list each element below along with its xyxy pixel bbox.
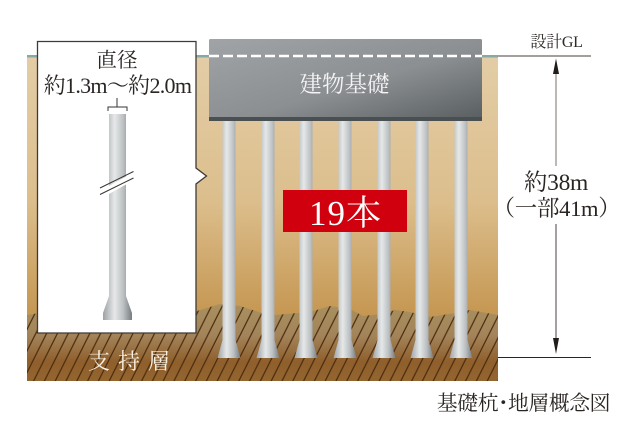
red label: 19 piles: [283, 190, 407, 233]
diameter value: 約1.3m～約2.0m: [44, 73, 192, 98]
icon: cutaway pile: [100, 114, 134, 320]
label: pile length: [493, 169, 620, 221]
label: pile length: （一部41m）: [493, 196, 620, 221]
label: pile length: 約38m: [524, 169, 588, 196]
building foundation: [209, 39, 482, 121]
label: building foundation: 建物基礎: [299, 72, 390, 97]
callout panel: pile detail: [38, 42, 206, 333]
diameter bracket: [108, 98, 127, 111]
bearing layer with hatching: [27, 300, 498, 381]
ground: sand layer: [27, 55, 498, 325]
caption: 基礎杭･地層概念図: [437, 392, 610, 415]
dimension lines: [498, 56, 591, 358]
heading: diameter: 直径: [96, 49, 138, 72]
label: design GL: 設計GL: [530, 33, 583, 51]
design GL dashed line: [209, 55, 482, 57]
foundation piles: [218, 118, 472, 358]
label: bearing layer: 支持層: [88, 349, 178, 374]
red label: 19 piles: 19本: [309, 194, 382, 233]
